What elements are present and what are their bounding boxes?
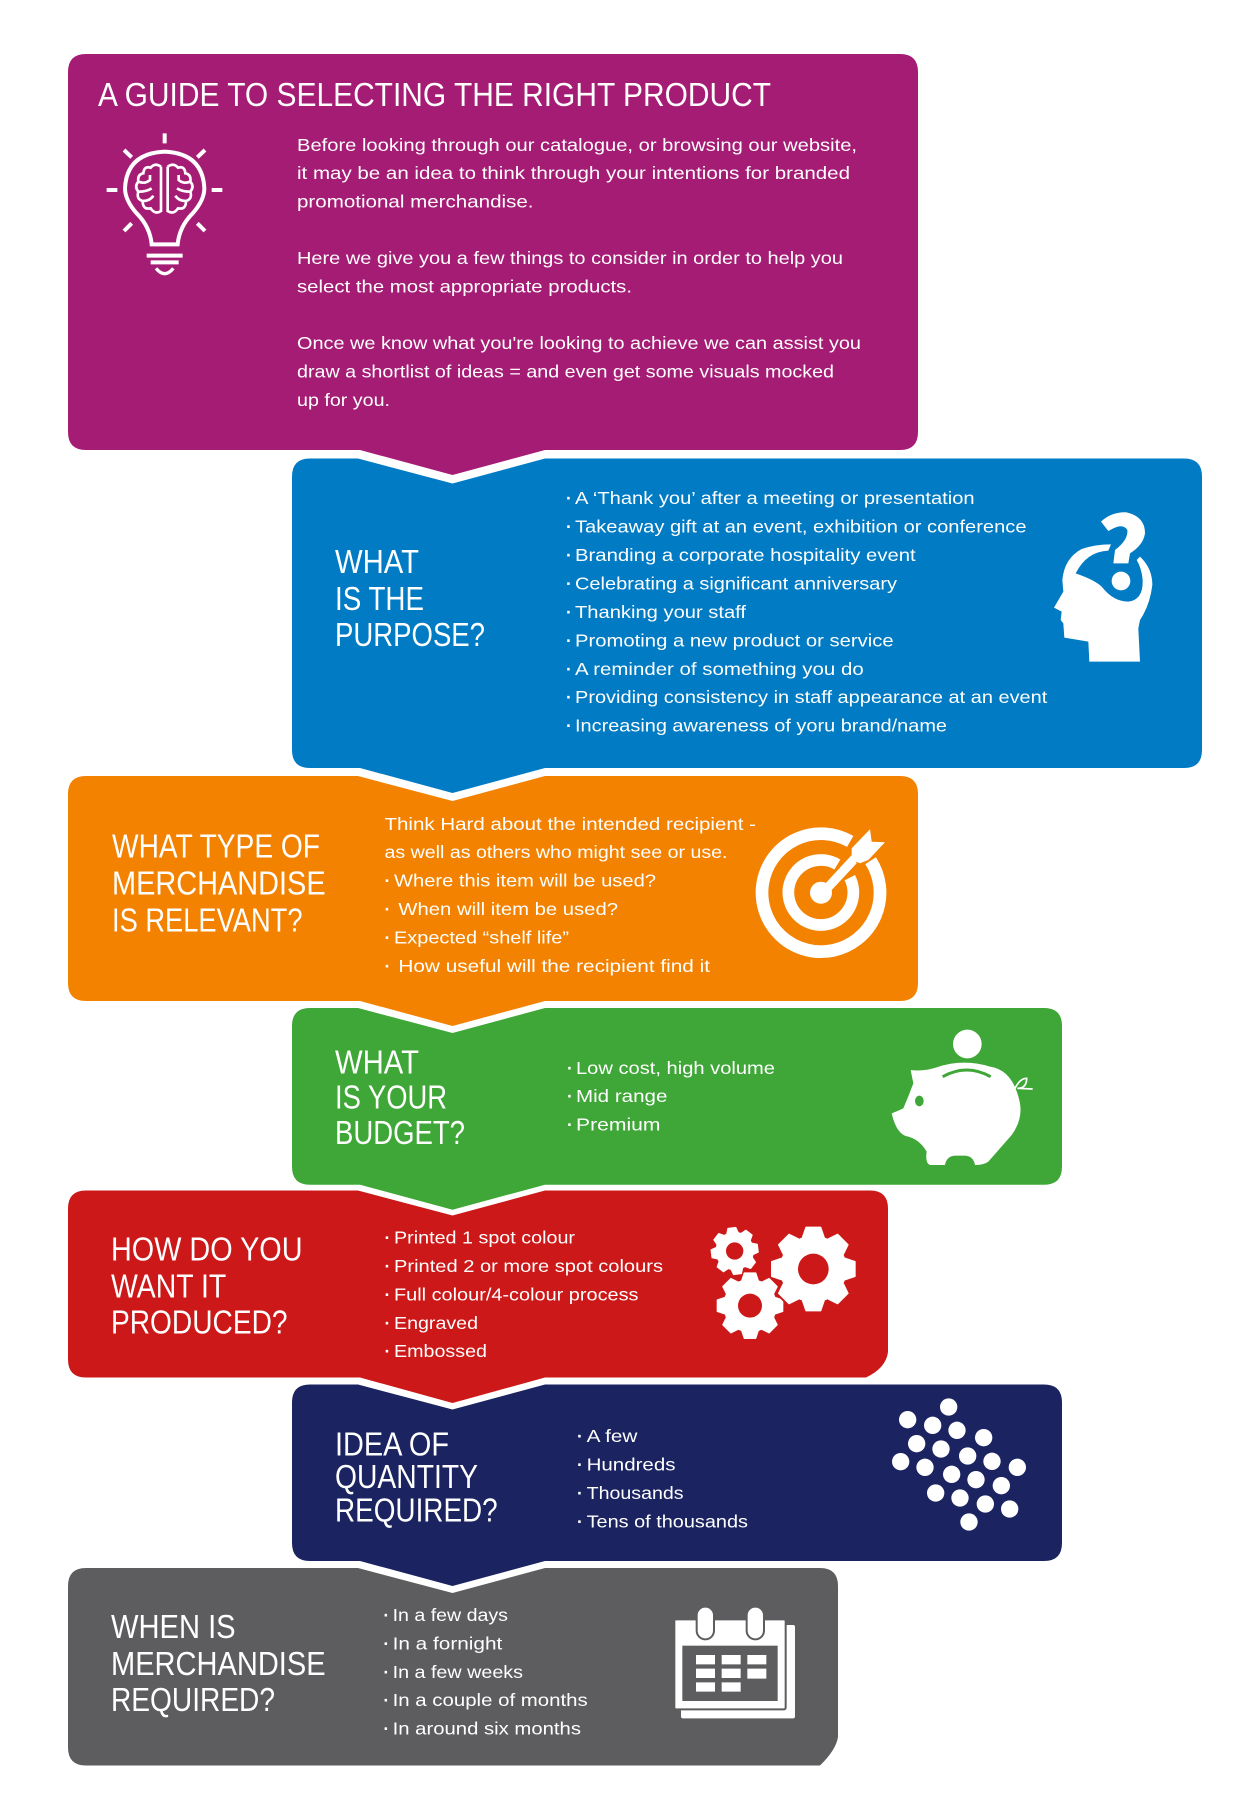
timing heading: WHEN IS <box>111 1608 236 1645</box>
purpose list: · <box>566 659 572 679</box>
budget list: Mid range <box>576 1086 667 1106</box>
production list: Printed 2 or more spot colours <box>394 1256 663 1276</box>
purpose list: · <box>566 630 572 650</box>
production list: Full colour/4-colour process <box>394 1284 639 1304</box>
merchandise type text <box>384 814 756 976</box>
merchandise type text: · <box>384 899 390 919</box>
panel: purpose <box>292 458 1202 793</box>
merchandise type heading: IS RELEVANT? <box>112 902 302 939</box>
production heading: PRODUCED? <box>111 1304 288 1340</box>
icon: dots <box>892 1398 1026 1531</box>
merchandise type text: · <box>384 956 390 976</box>
purpose list: Takeaway gift at an event, exhibition or conference <box>575 516 1026 536</box>
production background <box>68 1190 888 1403</box>
purpose list: · <box>566 602 572 622</box>
budget heading: WHAT <box>335 1043 419 1080</box>
production list: · <box>384 1256 390 1276</box>
purpose list: Increasing awareness of yoru brand/name <box>575 716 947 736</box>
panel: production <box>68 1190 888 1403</box>
purpose list: Branding a corporate hospitality event <box>575 545 916 565</box>
purpose list: · <box>566 545 572 565</box>
timing list: In around six months <box>393 1719 581 1739</box>
merchandise type text: · <box>384 871 390 891</box>
merchandise type background <box>68 776 918 1026</box>
intro background <box>68 54 918 475</box>
merchandise type text: Think Hard about the intended recipient - <box>384 814 756 834</box>
quantity list: A few <box>587 1426 638 1446</box>
timing list <box>383 1605 588 1739</box>
budget heading: BUDGET? <box>335 1114 465 1151</box>
timing list: In a fornight <box>393 1633 502 1653</box>
merchandise type text: How useful will the recipient find it <box>398 956 710 976</box>
intro text: Before looking through our catalogue, or browsing our website, <box>297 135 857 155</box>
production list: Engraved <box>394 1313 478 1333</box>
timing background <box>68 1568 838 1766</box>
merchandise type text: as well as others who might see or use. <box>384 842 728 862</box>
production list: · <box>384 1313 390 1333</box>
icon: target with arrow <box>762 829 885 952</box>
budget heading: IS YOUR <box>335 1078 447 1115</box>
production list: Printed 1 spot colour <box>394 1228 575 1248</box>
quantity list <box>577 1426 748 1531</box>
panel: merchandise type <box>68 776 918 1026</box>
intro text: Here we give you a few things to consider in order to help you <box>297 248 843 268</box>
timing list: In a couple of months <box>393 1690 588 1710</box>
quantity heading: QUANTITY <box>335 1458 478 1495</box>
merchandise type heading: MERCHANDISE <box>112 865 326 902</box>
icon: lightbulb with brain <box>107 133 222 274</box>
budget list: · <box>567 1086 573 1106</box>
timing list: · <box>383 1605 389 1625</box>
merchandise type text: · <box>384 927 390 947</box>
timing list: · <box>383 1690 389 1710</box>
intro text: promotional merchandise. <box>297 192 534 212</box>
purpose list: · <box>566 716 572 736</box>
icon: head with question mark <box>1054 512 1152 662</box>
production heading: HOW DO YOU <box>111 1230 302 1268</box>
timing list: In a few days <box>393 1605 508 1625</box>
icon: gears <box>709 1225 855 1338</box>
timing list: · <box>383 1633 389 1653</box>
budget list: Premium <box>576 1115 660 1135</box>
budget heading <box>335 1043 465 1151</box>
purpose list: · <box>566 687 572 707</box>
purpose list <box>566 488 1047 736</box>
production list: · <box>384 1341 390 1361</box>
purpose list: · <box>566 488 572 508</box>
purpose list: Providing consistency in staff appearance at an event <box>575 687 1047 707</box>
purpose heading <box>335 543 485 653</box>
quantity list: · <box>577 1426 583 1446</box>
budget list: · <box>567 1058 573 1078</box>
purpose heading: PURPOSE? <box>335 616 485 653</box>
merchandise type heading: WHAT TYPE OF <box>112 828 320 865</box>
timing list: · <box>383 1719 389 1739</box>
timing heading <box>111 1608 326 1718</box>
purpose list: Promoting a new product or service <box>575 630 894 650</box>
budget list: · <box>567 1115 573 1135</box>
panel: quantity <box>292 1384 1062 1586</box>
timing heading: MERCHANDISE <box>111 1645 326 1682</box>
timing list: In a few weeks <box>393 1662 523 1682</box>
purpose heading: IS THE <box>335 580 424 617</box>
timing heading: REQUIRED? <box>111 1681 275 1718</box>
purpose heading: WHAT <box>335 543 419 580</box>
purpose list: · <box>566 516 572 536</box>
purpose list: A ‘Thank you’ after a meeting or presentation <box>575 488 975 508</box>
quantity list: · <box>577 1483 583 1503</box>
purpose list: · <box>566 573 572 593</box>
intro text: select the most appropriate products. <box>297 276 632 296</box>
production list <box>384 1228 663 1361</box>
production list: Embossed <box>394 1341 487 1361</box>
purpose background <box>292 458 1202 793</box>
quantity list: Tens of thousands <box>587 1511 748 1531</box>
merchandise type text: When will item be used? <box>398 899 618 919</box>
quantity heading <box>335 1425 498 1528</box>
production heading: WANT IT <box>111 1268 226 1304</box>
purpose list: Celebrating a significant anniversary <box>575 573 897 593</box>
intro text: it may be an idea to think through your intentions for branded <box>297 163 850 183</box>
quantity list: · <box>577 1455 583 1475</box>
panel: timing <box>68 1568 838 1766</box>
panel: intro <box>68 54 918 475</box>
merchandise type text: Expected “shelf life” <box>394 927 569 947</box>
intro text: draw a shortlist of ideas = and even get some visuals mocked <box>297 362 834 382</box>
purpose list: A reminder of something you do <box>575 659 864 679</box>
budget background <box>292 1008 1062 1210</box>
quantity heading: IDEA OF <box>335 1425 449 1462</box>
icon: calendar <box>674 1607 795 1718</box>
intro text <box>297 135 861 410</box>
production list: · <box>384 1228 390 1248</box>
quantity heading: REQUIRED? <box>335 1491 498 1528</box>
quantity background <box>292 1384 1062 1586</box>
purpose list: Thanking your staff <box>575 602 746 622</box>
icon: piggy bank <box>892 1030 1033 1165</box>
merchandise type text: Where this item will be used? <box>394 871 656 891</box>
merchandise type heading <box>112 828 326 939</box>
intro text: Once we know what you're looking to achieve we can assist you <box>297 333 861 353</box>
budget list: Low cost, high volume <box>576 1058 775 1078</box>
panel: budget <box>292 1008 1062 1210</box>
quantity list: Hundreds <box>587 1455 676 1475</box>
quantity list: Thousands <box>587 1483 684 1503</box>
intro text: up for you. <box>297 390 390 410</box>
production list: · <box>384 1284 390 1304</box>
production heading <box>111 1230 302 1340</box>
budget list <box>567 1058 775 1135</box>
timing list: · <box>383 1662 389 1682</box>
title: A GUIDE TO SELECTING THE RIGHT PRODUCT <box>98 76 771 113</box>
quantity list: · <box>577 1511 583 1531</box>
